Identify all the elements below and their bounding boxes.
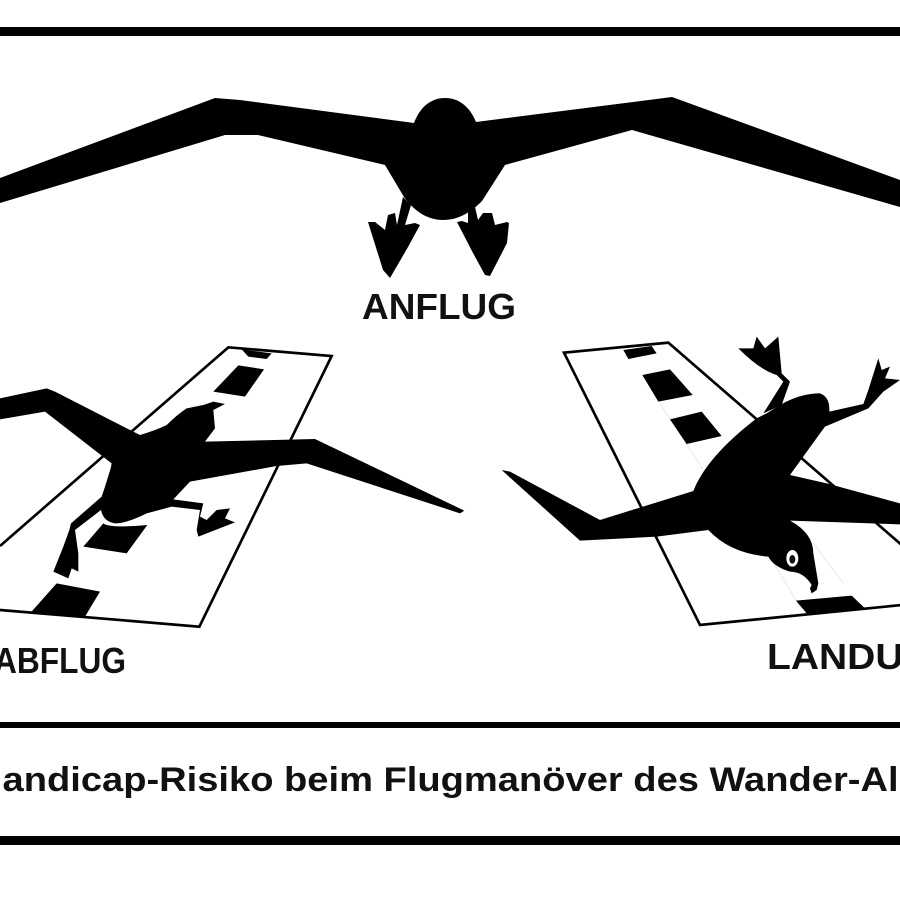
illustration: albatross landing over runway (right): [502, 337, 900, 625]
illustration: albatross approach (top): [0, 97, 900, 278]
illustration: albatross take-off over runway (left): [0, 347, 464, 627]
label: Anflug: ANFLUG: [362, 286, 516, 327]
